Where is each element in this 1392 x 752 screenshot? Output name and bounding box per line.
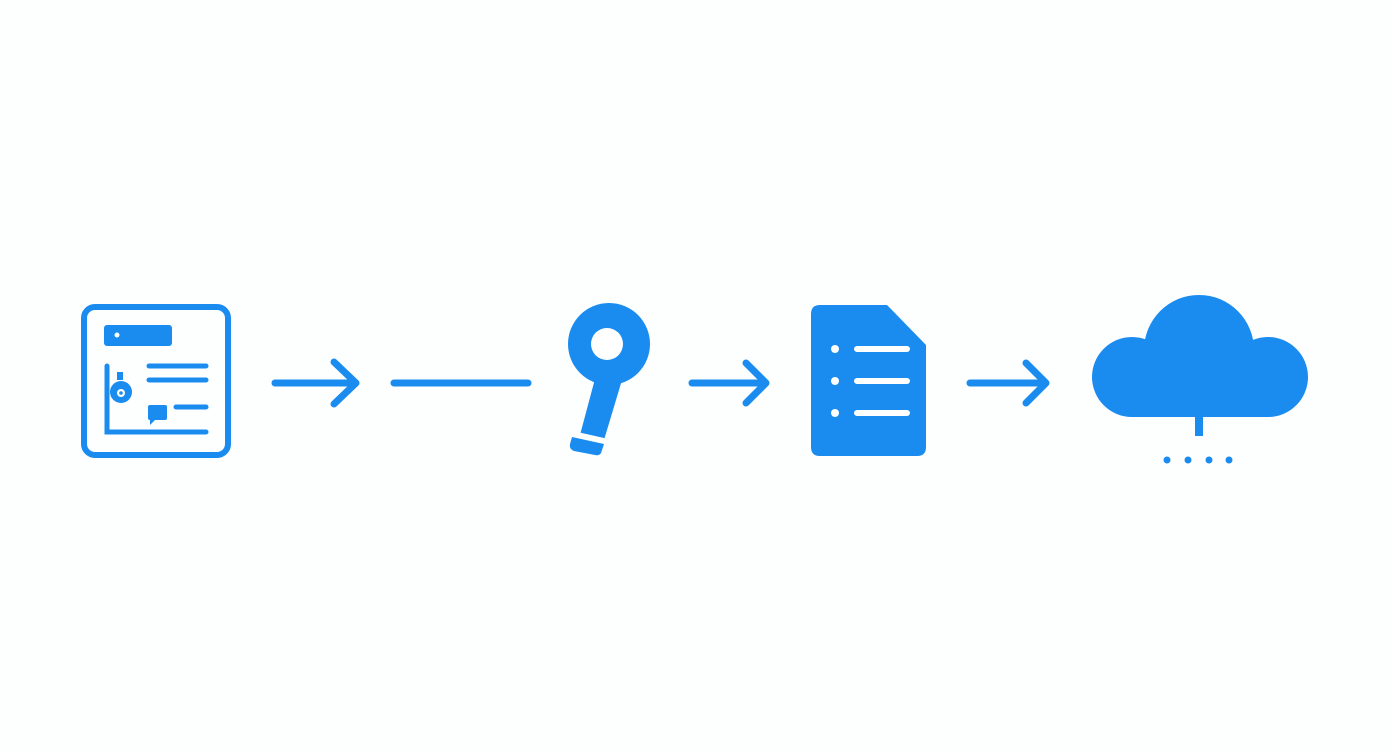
icon: list document — [811, 305, 926, 456]
icon: form document — [84, 307, 228, 455]
arrow 3 — [970, 363, 1046, 403]
icon: cloud — [1092, 295, 1308, 464]
arrow 1 — [275, 362, 356, 404]
arrow 2 — [692, 363, 766, 403]
icon: key — [568, 303, 650, 455]
connector line — [394, 380, 528, 386]
